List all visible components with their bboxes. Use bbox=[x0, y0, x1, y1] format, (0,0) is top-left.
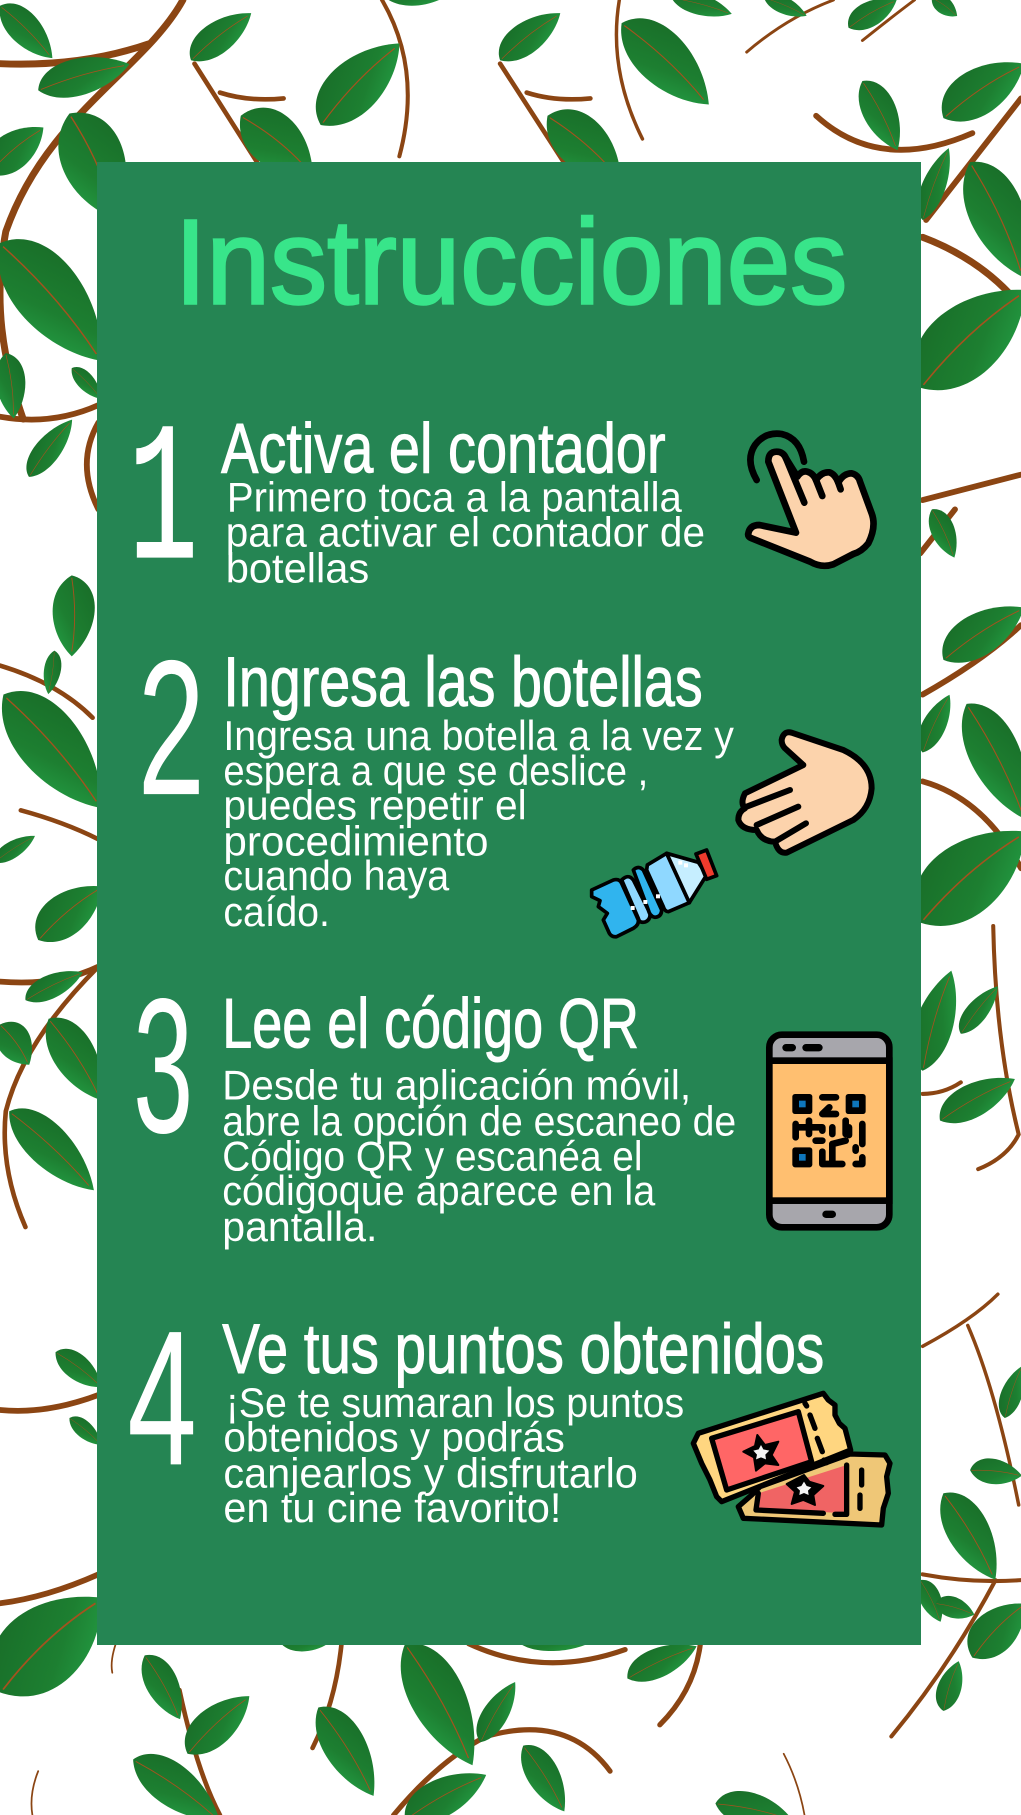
number 3: 3 bbox=[133, 958, 193, 1173]
heading: step 3: Lee el código QR bbox=[222, 984, 639, 1063]
number 4: 4 bbox=[127, 1290, 197, 1505]
panel: step 3 bbox=[133, 958, 889, 1250]
text: step 4 description: canjearlos y disfrutarlo bbox=[223, 1450, 638, 1497]
text: step 4 description: ¡Se te sumaran los puntos bbox=[226, 1379, 684, 1426]
text: step 3 description: Desde tu aplicación móvil, bbox=[222, 1062, 691, 1109]
icon: plastic bottle bbox=[592, 850, 717, 937]
text: step 2 description: caído. bbox=[223, 888, 330, 935]
text: step 1 description: botellas bbox=[226, 544, 369, 591]
icon: cinema tickets bbox=[693, 1393, 890, 1525]
text: step 2 description: procedimiento bbox=[223, 817, 489, 864]
icon: open hand bbox=[738, 732, 872, 853]
panel: step 2 bbox=[138, 620, 872, 937]
text: step 4 description: obtenidos y podrás bbox=[223, 1414, 565, 1461]
icon: phone with QR code bbox=[769, 1035, 889, 1227]
text: step 2 description: espera a que se deslice , bbox=[223, 747, 648, 794]
title: Instrucciones bbox=[175, 194, 847, 329]
text: step 3 description: códigoque aparece en la bbox=[222, 1167, 656, 1214]
heading: step 1: Activa el contador bbox=[221, 408, 666, 487]
text: step 3 description bbox=[222, 1062, 736, 1250]
text: step 2 description: cuando haya bbox=[223, 852, 450, 899]
text: step 2 description: puedes repetir el bbox=[223, 782, 527, 829]
text: step 2 description: Ingresa una botella a la vez y bbox=[223, 712, 734, 759]
text: step 3 description: abre la opción de escaneo de bbox=[222, 1098, 736, 1145]
text: step 2 description bbox=[223, 712, 734, 935]
text: step 1 description: Primero toca a la pantalla bbox=[227, 474, 683, 521]
panel: step 1 bbox=[128, 394, 874, 617]
number 2: 2 bbox=[138, 620, 205, 835]
text: step 1 description bbox=[226, 474, 705, 591]
text: step 3 description: pantalla. bbox=[222, 1203, 377, 1250]
heading: step 4: Ve tus puntos obtenidos bbox=[222, 1309, 824, 1388]
text: step 4 description: en tu cine favorito! bbox=[223, 1484, 561, 1531]
panel: green instructions card bbox=[97, 162, 921, 1645]
icon: hand tapping bbox=[748, 434, 874, 566]
text: step 4 description bbox=[223, 1379, 684, 1531]
number 1: 1 bbox=[128, 394, 198, 617]
panel: step 4 bbox=[127, 1290, 890, 1531]
heading: step 2: Ingresa las botellas bbox=[223, 642, 703, 721]
text: step 1 description: para activar el contador de bbox=[226, 508, 705, 555]
text: step 3 description: Código QR y escanéa el bbox=[222, 1132, 642, 1179]
